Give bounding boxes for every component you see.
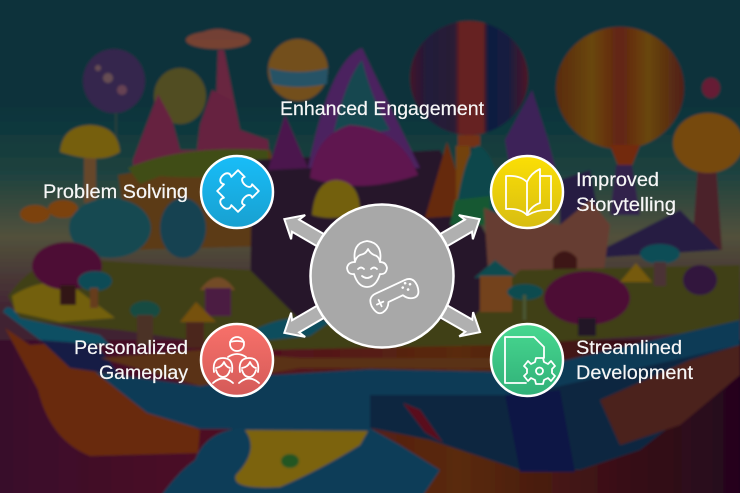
island surface [8, 258, 740, 350]
label: improved storytelling: Improved [576, 170, 659, 191]
balloon: olive [154, 68, 206, 124]
yellow patch [235, 430, 368, 488]
mushroom: teal right [640, 244, 680, 286]
navy shade left [35, 335, 120, 375]
bush: purple right [683, 265, 717, 295]
dark underside [370, 345, 740, 470]
tent: amber [180, 302, 216, 348]
yellow shore left [12, 283, 115, 322]
label: streamlined development: Development [576, 363, 694, 384]
huts: teal roof [474, 260, 543, 320]
mushroom: teal left [78, 271, 112, 308]
label: improved storytelling [576, 170, 676, 216]
blue pool bottom [160, 428, 440, 493]
tree: magenta right [544, 271, 630, 336]
arrow: up-right [427, 207, 487, 258]
balloon: orange right [673, 113, 740, 250]
cone: teal green [450, 145, 505, 225]
arrows radiating from centre [277, 207, 487, 345]
icon: game controller [368, 276, 421, 316]
node: streamlined development [491, 324, 563, 396]
icon: document with gear [505, 337, 555, 384]
icon: three people [213, 337, 259, 383]
castle: pink towers [133, 90, 270, 172]
blue band central [95, 320, 740, 429]
pavilion [200, 278, 235, 316]
label: streamlined development [576, 338, 694, 384]
cliff stripes right [600, 345, 740, 445]
icon: puzzle piece [207, 165, 259, 217]
spires: right [560, 170, 720, 260]
dark centre backdrop [250, 150, 500, 345]
lantern mushrooms [130, 301, 160, 345]
label: improved storytelling: Storytelling [576, 195, 676, 216]
balloons: teal [69, 198, 206, 258]
balloon: small red [702, 78, 720, 98]
sand ledge [100, 350, 500, 386]
icon: open book [506, 169, 551, 215]
mushroom: yellow [60, 125, 120, 203]
cliff violet [505, 390, 575, 472]
arrow: down-left [277, 294, 337, 345]
bush: green [281, 454, 299, 468]
arrow: up-left [277, 207, 337, 258]
central hub: gamer [310, 204, 454, 348]
cone: purple and teal [268, 48, 420, 186]
cone: orange [425, 142, 470, 218]
mushrooms: orange [20, 200, 78, 223]
balloon: purple spotted [83, 49, 145, 143]
balloon: striped red and navy [410, 21, 528, 147]
label: streamlined development: Streamlined [576, 338, 682, 359]
tent: yellow right [620, 263, 652, 282]
balloon: orange and blue [268, 39, 328, 101]
stem: balloon orange [456, 146, 470, 206]
tree: magenta left [32, 242, 102, 305]
blue rim left [3, 307, 110, 345]
node: personalized gameplay [201, 324, 273, 396]
mushroom: yellow centre [312, 180, 360, 218]
castle: tan keep [484, 200, 610, 300]
label: personalized gameplay [74, 338, 188, 384]
node: improved storytelling [491, 156, 563, 228]
towers: violet [505, 90, 556, 170]
balloon: big orange [556, 27, 684, 215]
label: personalized gameplay: Personalized [74, 338, 188, 359]
arched door [553, 251, 577, 290]
arrow: down-right [427, 294, 487, 344]
title: enhanced engagement: Enhanced Engagement [280, 99, 485, 120]
pool [250, 318, 330, 340]
label: personalized gameplay: Gameplay [99, 363, 188, 384]
cliff red [403, 403, 443, 443]
icon: boy face [347, 241, 387, 287]
label: problem solving: Problem Solving [43, 182, 188, 203]
node: problem solving [201, 156, 273, 228]
island upper body [118, 150, 300, 250]
grass ledge [128, 149, 268, 184]
orange cliff left [5, 328, 200, 456]
tower: mushroom roof [186, 29, 250, 160]
